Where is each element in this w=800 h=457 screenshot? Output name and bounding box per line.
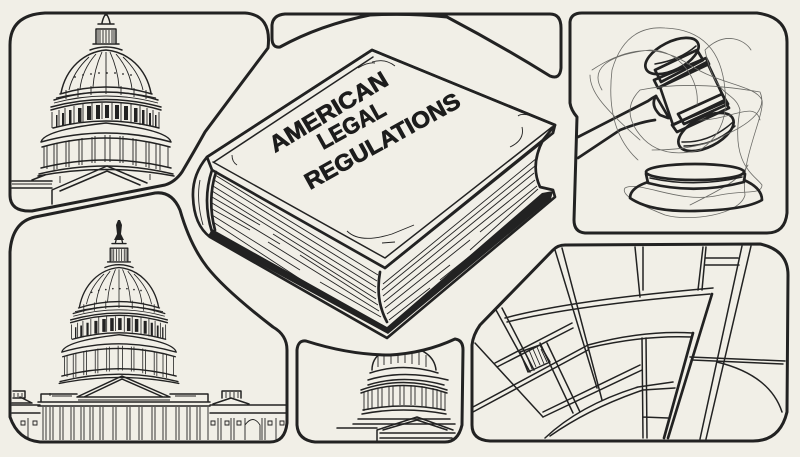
statue [114,220,124,240]
book title: REGULATIONS [300,87,465,194]
book illustration [193,50,555,338]
panel: capitol dome bottom centre [297,339,463,442]
book body outline [193,50,555,338]
left page edges [212,175,381,317]
sound block [630,164,762,211]
book cover [207,50,555,268]
panel: capitol dome top left [10,13,269,211]
capitol illustration [337,345,455,442]
book title: AMERICAN [264,66,392,157]
panel: top centre shape [272,14,561,77]
capitol illustration [12,220,286,440]
gavel head [640,30,740,159]
book title [264,66,465,194]
street lines [473,246,785,439]
book base band [208,191,553,334]
panel: capitol building bottom left [10,193,287,442]
panel: gavel [570,13,787,233]
scribble lines [590,28,762,218]
book title: LEGAL [313,96,390,154]
hatched block [520,345,550,372]
panel: street map [472,244,788,441]
panel outline [10,193,287,442]
panel outline [570,13,787,233]
panel outline [297,339,463,442]
panel outline [472,244,788,441]
gavel handle [578,96,656,158]
right page edges [382,158,538,320]
panel outline [10,13,269,211]
capitol illustration [12,15,174,204]
